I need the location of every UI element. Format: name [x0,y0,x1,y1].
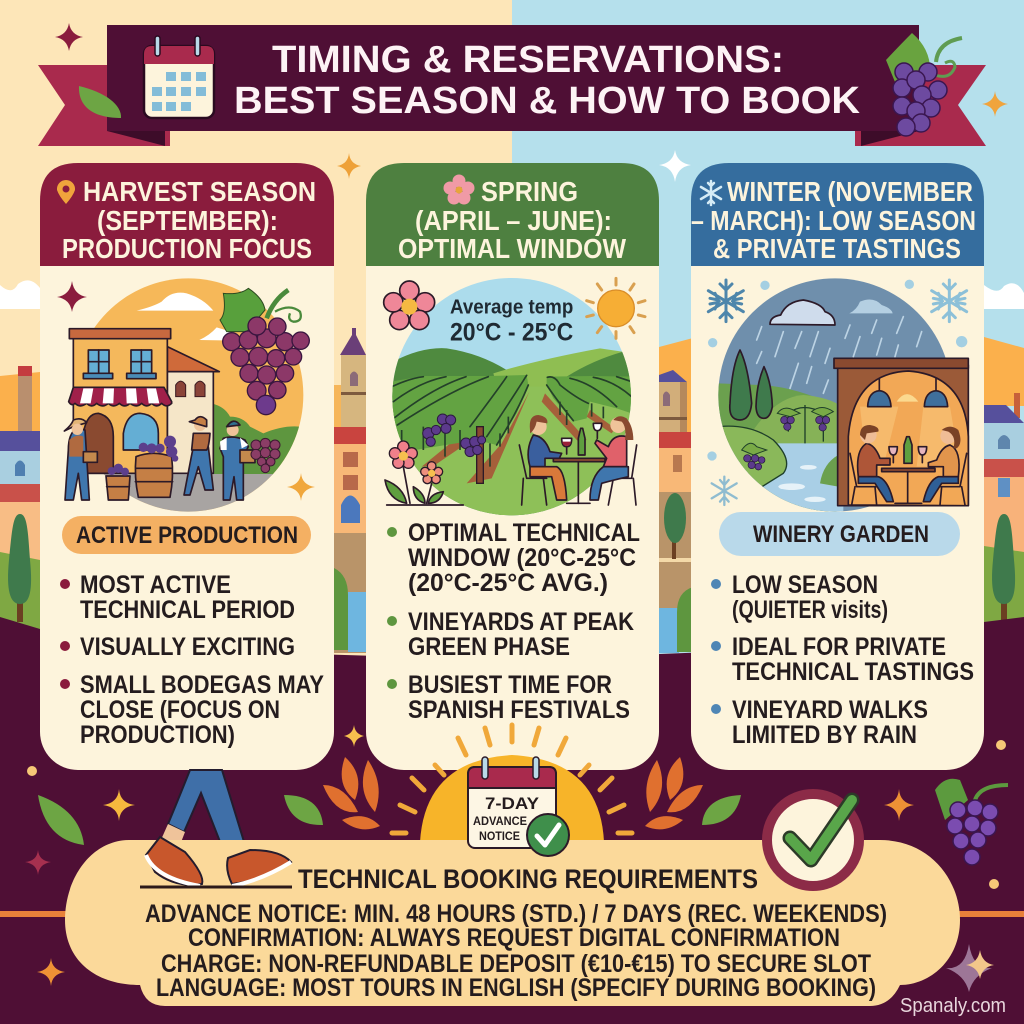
bullet list: VINEYARDS AT PEAK [408,608,634,636]
title text: BEST SEASON & HOW TO BOOK [234,80,861,122]
panel header: (SEPTEMBER): [97,205,278,236]
illustration: vineyard and tasting [384,277,645,523]
bullet list: VISUALLY EXCITING [80,633,295,661]
snowflake [932,280,967,322]
bullet list: TECHNICAL TASTINGS [732,658,974,686]
workers and barrels [64,417,280,500]
icon: 7-day calendar: ADVANCE [473,816,527,828]
flowers foreground [385,441,463,505]
bullet list [60,571,324,749]
booking details [145,900,887,1002]
panel body [40,163,334,770]
bullet list: OPTIMAL TECHNICAL [408,519,640,547]
sun behind calendar [392,725,632,842]
panel header [366,163,659,266]
bullet list: BUSIEST TIME FOR [408,671,612,699]
panel body [691,163,984,770]
icon: leaf [79,86,121,118]
bullet list: VINEYARD WALKS [732,696,928,724]
panel header [691,163,984,266]
pill: winery garden: WINERY GARDEN [753,521,929,548]
panel: booking requirements [65,837,960,1006]
icon: 7-day calendar: NOTICE [479,829,520,843]
ribbon tails [38,65,986,146]
orange stripe [0,911,1024,917]
bullet list: PRODUCTION) [80,721,235,749]
wine ground [0,617,1024,1024]
bullet list: LOW SEASON [732,571,878,599]
title text [234,39,861,122]
banner body [107,25,919,131]
temperature text: 20°C - 25°C [450,319,573,347]
bullet list: SMALL BODEGAS MAY [80,671,324,699]
booking details: CHARGE: NON-REFUNDABLE DEPOSIT (€10-€15) TO SECURE SLOT [161,950,871,978]
booking details: ADVANCE NOTICE: MIN. 48 HOURS (STD.) / 7 DAYS (REC. WEEKENDS) [145,900,887,928]
panel: harvest season [40,163,334,770]
temperature text: Average temp [450,296,573,318]
vine rows left [392,375,528,467]
sheltered room [834,358,968,506]
watermark star [946,944,994,992]
bullet list [711,571,974,749]
bullet list: IDEAL FOR PRIVATE [732,633,946,661]
illustration: winery with workers and grapes [63,277,309,517]
bullet list: LIMITED BY RAIN [732,721,917,749]
booking heading: TECHNICAL BOOKING REQUIREMENTS [298,864,758,894]
illustration: rain and sheltered tasting [707,277,968,517]
panel header: HARVEST SEASON [83,176,316,207]
panel header: OPTIMAL WINDOW [398,233,627,264]
grapes bottom right [935,779,1008,865]
trellis and grapes [423,414,486,483]
snowflake [712,477,737,505]
panel header: (APRIL – JUNE): [415,205,612,236]
snow dots [707,280,967,461]
bullet list [387,519,640,724]
grape cluster [220,288,309,415]
panel header: PRODUCTION FOCUS [62,233,312,264]
panel header: WINTER (NOVEMBER [727,176,973,207]
background: sky and town [0,0,1024,660]
pill: winery garden [719,512,960,556]
bullet list: SPANISH FESTIVALS [408,696,630,724]
walking legs [160,770,250,864]
icon: 7-day calendar [468,757,569,856]
bullet list: (20°C-25°C AVG.) [408,569,608,597]
icon: grapes [886,33,962,136]
icon: shoes [140,837,292,887]
bullet list: CLOSE (FOCUS ON [80,696,280,724]
panel header [40,163,334,266]
bullet list: (QUIETER visits) [732,596,888,624]
icon: large check mark [767,794,859,886]
bullet list: TECHNICAL PERIOD [80,596,295,624]
vines [742,405,833,470]
pill: active production: ACTIVE PRODUCTION [76,522,298,549]
vine rows right [547,376,632,425]
bullet list: WINDOW (20°C-25°C [408,544,636,572]
title banner [38,25,986,146]
snowflakes [708,280,743,322]
tasting couple [519,415,637,505]
star [287,473,315,501]
watermark text: Spanaly.com [900,995,1006,1017]
booking details: LANGUAGE: MOST TOURS IN ENGLISH (SPECIFY DURING BOOKING) [156,974,876,1002]
big flower [384,281,435,330]
bullet list: GREEN PHASE [408,633,570,661]
star [57,281,87,312]
icon: 7-day calendar: 7-DAY [485,794,540,813]
panel header: SPRING [481,176,578,207]
autumn sprigs [38,757,741,845]
title text: TIMING & RESERVATIONS: [272,39,784,81]
panel body [366,163,659,770]
bullet list: MOST ACTIVE [80,571,231,599]
panel: spring [366,163,659,770]
pill: active production [62,516,311,554]
booking details: CONFIRMATION: ALWAYS REQUEST DIGITAL CONFIRMATION [188,924,840,952]
panel header: & PRIVATE TASTINGS [713,233,961,264]
icon: calendar [144,36,214,118]
temperature text [450,296,573,347]
icon: sun [587,278,645,338]
panel: winter [691,163,984,770]
